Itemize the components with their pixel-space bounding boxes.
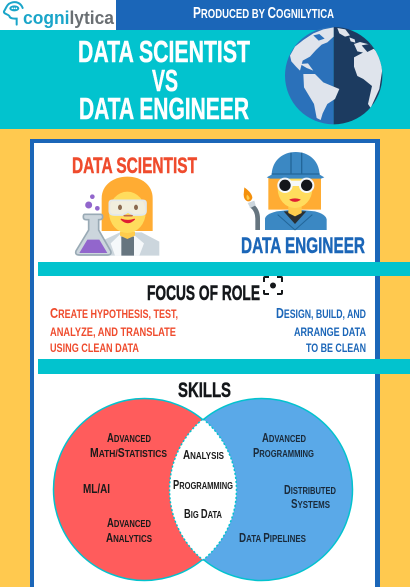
scientist focus text: CREATE HYPOTHESIS, TEST, <box>50 305 178 322</box>
venn: data engineer circle <box>170 398 352 580</box>
engineer focus text: TO BE CLEAN <box>306 341 366 355</box>
scientist skills: ADVANCED <box>107 515 151 530</box>
content panel <box>30 139 380 587</box>
scientist focus text <box>50 305 178 355</box>
icon: focus target <box>264 277 282 294</box>
focus of role heading: FOCUS OF ROLE <box>147 282 260 305</box>
scientist skills: ANALYTICS <box>106 530 152 545</box>
teal band bottom <box>38 359 410 374</box>
shared skills <box>173 447 233 521</box>
title: VS <box>152 63 178 98</box>
scientist skills: ADVANCED <box>107 430 151 445</box>
shared skills: ANALYSIS <box>183 447 224 462</box>
engineer focus text: DESIGN, BUILD, AND <box>276 305 366 322</box>
engineer skills: PROGRAMMING <box>253 445 314 460</box>
venn: overlap <box>170 419 236 560</box>
producer credit: PRODUCED BY COGNILYTICA <box>193 5 334 22</box>
title <box>78 34 250 126</box>
scientist heading: DATA SCIENTIST <box>72 153 197 178</box>
icon: woman engineer <box>244 152 327 230</box>
icon: globe <box>283 26 384 126</box>
scientist skills <box>83 430 167 545</box>
venn: data scientist circle <box>54 398 236 580</box>
icon: brain head <box>4 2 23 25</box>
engineer skills: ADVANCED <box>262 430 306 445</box>
engineer skills <box>239 430 336 545</box>
venn diagram <box>54 398 352 580</box>
skills heading: SKILLS <box>178 379 231 402</box>
engineer skills: DISTRIBUTED <box>284 482 336 497</box>
wordmark: cognilytica <box>23 8 115 28</box>
header bar <box>116 0 410 30</box>
shared skills: PROGRAMMING <box>173 477 233 492</box>
scientist focus text: ANALYZE, AND TRANSLATE <box>50 325 176 339</box>
title band <box>0 26 410 129</box>
title: DATA SCIENTIST <box>78 34 250 69</box>
scientist focus text: USING CLEAN DATA <box>50 341 139 355</box>
engineer skills: SYSTEMS <box>291 496 330 511</box>
logo <box>0 0 116 30</box>
scientist skills: MATH/STATISTICS <box>90 445 167 460</box>
engineer focus text <box>276 305 366 355</box>
icon: woman scientist <box>76 177 159 256</box>
shared skills: BIG DATA <box>184 506 222 521</box>
scientist skills: ML/AI <box>83 481 110 496</box>
title: DATA ENGINEER <box>79 91 249 126</box>
teal band top <box>38 262 410 276</box>
engineer skills: DATA PIPELINES <box>239 530 306 545</box>
engineer focus text: ARRANGE DATA <box>294 325 366 339</box>
